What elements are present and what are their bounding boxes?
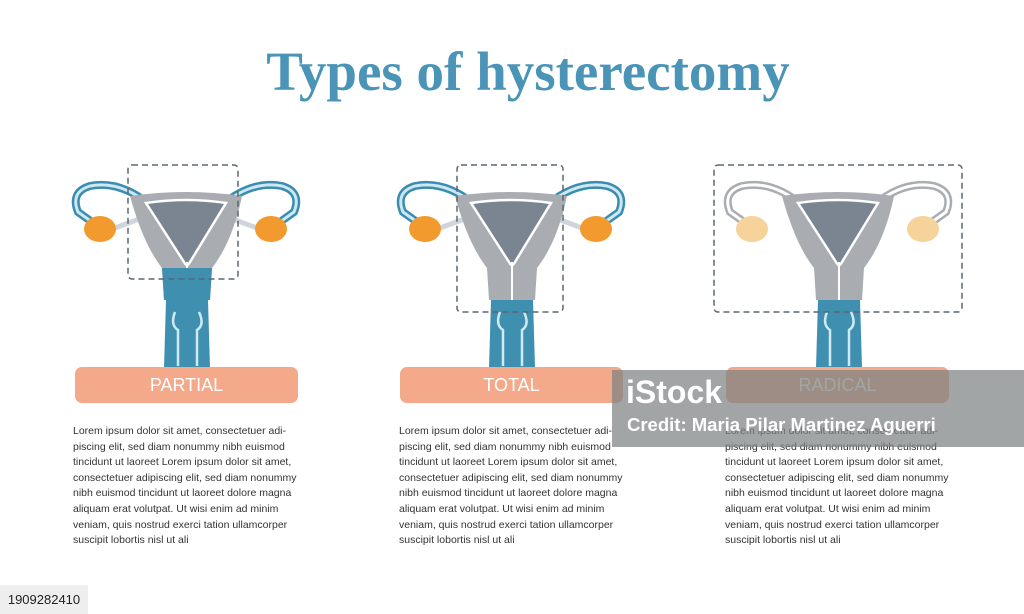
text: total: Lorem ipsum dolor sit amet, consectetuer adi-	[399, 425, 612, 437]
text: radical: piscing elit, sed diam nonummy nibh euismod	[725, 441, 937, 453]
text: total: suscipit lobortis nisl ut ali	[399, 534, 515, 546]
text: total: consectetuer adipiscing elit, sed diam nonummy	[399, 472, 623, 484]
watermark band: Credit: Maria Pilar Martinez Aguerri	[627, 414, 936, 435]
text: total: tincidunt ut laoreet Lorem ipsum dolor sit amet,	[399, 456, 617, 468]
text: partial: veniam, quis nostrud exerci tation ullamcorper	[73, 519, 287, 531]
text: radical: veniam, quis nostrud exerci tation ullamcorper	[725, 519, 939, 531]
watermark band: iStock	[626, 374, 722, 410]
label: total	[400, 367, 623, 403]
label: radical	[726, 367, 949, 403]
text: total: aliquam erat volutpat. Ut wisi enim ad minim	[399, 503, 604, 515]
title: Types of hysterectomy	[266, 41, 790, 102]
id tag: 1909282410	[8, 592, 80, 607]
text: total: piscing elit, sed diam nonummy nibh euismod	[399, 441, 611, 453]
text: total	[399, 425, 623, 546]
text: radical: suscipit lobortis nisl ut ali	[725, 534, 841, 546]
text: partial: consectetuer adipiscing elit, sed diam nonummy	[73, 472, 297, 484]
watermark band	[612, 370, 1024, 447]
text: partial: aliquam erat volutpat. Ut wisi enim ad minim	[73, 503, 278, 515]
text: partial: nibh euismod tincidunt ut laoreet dolore magna	[73, 487, 291, 499]
text: radical: Lorem ipsum dolor sit amet, consectetuer adi-	[725, 425, 938, 437]
label: radical: RADICAL	[798, 375, 877, 395]
text: partial: tincidunt ut laoreet Lorem ipsum dolor sit amet,	[73, 456, 291, 468]
text: radical: tincidunt ut laoreet Lorem ipsum dolor sit amet,	[725, 456, 943, 468]
text: radical: aliquam erat volutpat. Ut wisi enim ad minim	[725, 503, 930, 515]
panel: partial illustration	[76, 165, 296, 368]
panel: total illustration	[401, 165, 621, 368]
panel: radical illustration	[714, 165, 962, 368]
label: total: TOTAL	[483, 375, 540, 395]
label: partial	[75, 367, 298, 403]
label: partial: PARTIAL	[150, 375, 223, 395]
text: radical: nibh euismod tincidunt ut laoreet dolore magna	[725, 487, 943, 499]
text: partial: Lorem ipsum dolor sit amet, consectetuer adi-	[73, 425, 286, 437]
text: total: veniam, quis nostrud exerci tation ullamcorper	[399, 519, 613, 531]
text: radical: consectetuer adipiscing elit, sed diam nonummy	[725, 472, 949, 484]
text: partial: piscing elit, sed diam nonummy nibh euismod	[73, 441, 285, 453]
text: total: nibh euismod tincidunt ut laoreet dolore magna	[399, 487, 617, 499]
text: partial: suscipit lobortis nisl ut ali	[73, 534, 189, 546]
id tag	[0, 585, 88, 614]
text: partial	[73, 425, 297, 546]
text: radical	[725, 425, 949, 546]
